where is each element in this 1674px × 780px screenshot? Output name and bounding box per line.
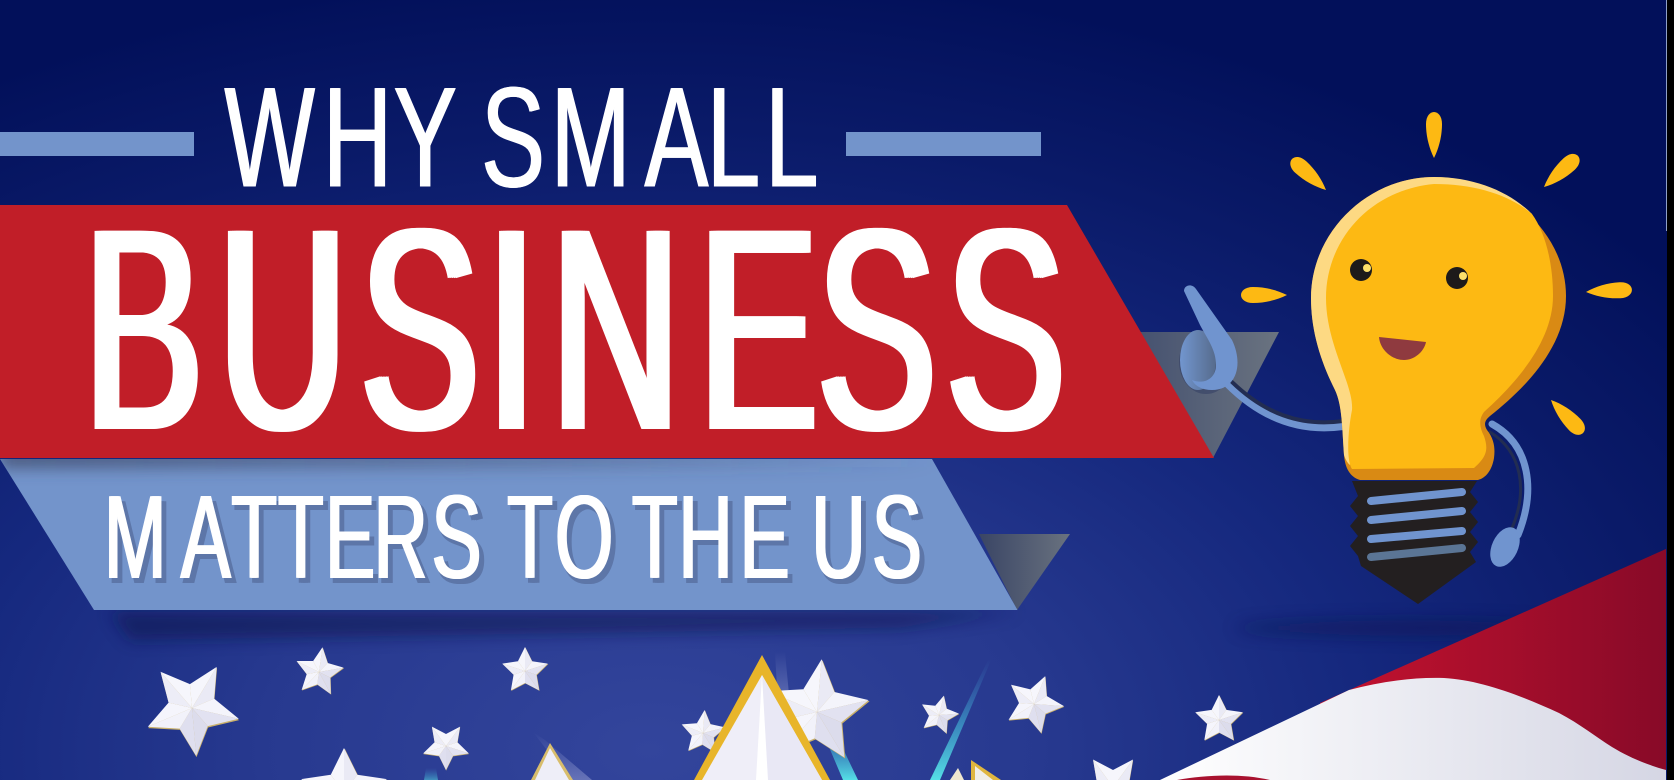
right eye xyxy=(1446,267,1468,289)
thin edge line xyxy=(1666,0,1667,231)
decorative bars beside heading xyxy=(0,132,1041,156)
black right edge xyxy=(1667,0,1674,780)
mouth xyxy=(1379,337,1426,360)
triangle fold behind red banner xyxy=(1140,332,1279,458)
heading line: why small: WHY SMALL xyxy=(224,57,818,217)
right arm xyxy=(1490,424,1528,535)
screw stripes xyxy=(1371,492,1462,557)
banner top shade xyxy=(0,450,940,467)
bulb glass: main yellow xyxy=(1326,184,1553,469)
screw base xyxy=(1350,481,1478,604)
right rockets xyxy=(950,760,1001,780)
main rocket xyxy=(694,655,830,780)
heading line: matters to the us: MATTERS TO THE US xyxy=(104,472,922,604)
light bulb character xyxy=(1179,112,1632,604)
triangle fold behind blue banner xyxy=(979,534,1070,610)
shadow under bulb xyxy=(1235,620,1575,636)
right hand xyxy=(1484,522,1526,572)
flag: lower red stripe xyxy=(1177,775,1270,780)
bulb glass: highlight xyxy=(1311,177,1532,465)
blue banner xyxy=(0,459,1018,610)
left arm xyxy=(1228,382,1343,427)
left eye xyxy=(1350,259,1372,281)
rocket trails xyxy=(424,652,992,780)
flag: white stripe xyxy=(1160,678,1666,780)
light rays xyxy=(1241,112,1632,439)
bulb glass: outer shadow xyxy=(1311,177,1566,480)
red banner xyxy=(0,205,1214,458)
left hand xyxy=(1179,285,1238,394)
heading line: business: BUSINESS xyxy=(84,168,1065,490)
flag: red stripe xyxy=(1320,549,1666,780)
flag xyxy=(1160,549,1666,780)
stars xyxy=(132,643,1243,780)
small left rocket xyxy=(531,743,573,780)
shadow under blue banner xyxy=(110,612,1020,640)
